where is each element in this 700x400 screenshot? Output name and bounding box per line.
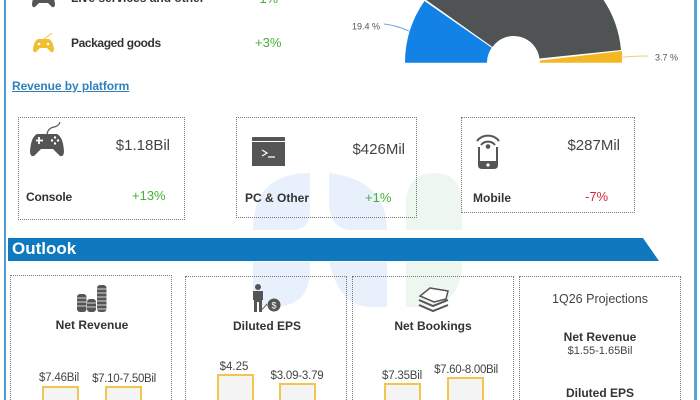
value: guidance: $7.10-7.50Bil	[92, 373, 156, 385]
label: 3.7 %: 3.7 %	[655, 52, 678, 62]
value: $426Mil	[352, 141, 405, 158]
label: 19.4 %: 19.4 %	[352, 22, 380, 32]
panel: pc and other	[236, 117, 417, 218]
label: net revenue: Net Revenue	[564, 330, 636, 344]
bar: guidance	[279, 383, 316, 400]
outer frame left edge	[4, 0, 6, 400]
value: net revenue: $1.55-1.65Bil	[568, 345, 632, 357]
change: +13%	[132, 188, 166, 203]
label: PC & Other	[245, 191, 309, 205]
value: guidance: $7.60-8.00Bil	[434, 364, 498, 376]
icon: mobile signal	[476, 134, 500, 169]
bar: prior	[384, 383, 421, 400]
heading: outlook: Outlook	[12, 239, 76, 258]
heading: revenue by platform: Revenue by platform	[12, 79, 129, 93]
half donut chart	[352, 0, 678, 63]
value: prior: $4.25	[220, 361, 248, 373]
icon: stacked papers	[418, 287, 449, 312]
leader: blue	[384, 24, 409, 31]
outer frame right edge	[694, 0, 697, 400]
value: prior: $7.35Bil	[382, 370, 422, 382]
value: prior: $7.46Bil	[39, 372, 79, 384]
panel: net bookings	[352, 276, 514, 400]
bar: guidance	[447, 377, 484, 400]
row label: packaged goods: Packaged goods	[71, 36, 161, 50]
panel: net revenue	[10, 275, 172, 400]
segment: blue	[405, 1, 492, 63]
icon: coin stacks	[77, 285, 106, 312]
panel: console	[18, 117, 185, 220]
icon: gamepad	[30, 122, 64, 156]
segment: grey	[426, 0, 621, 58]
icon: terminal	[252, 137, 285, 166]
section banner: outlook	[8, 238, 659, 261]
icon: packaged goods controller	[33, 32, 54, 52]
heading: Net Revenue	[56, 318, 128, 332]
bar: guidance	[105, 386, 142, 400]
value: $1.18Bil	[116, 137, 170, 154]
panel: mobile	[461, 117, 635, 213]
leader: yellow	[623, 56, 648, 57]
segment: yellow	[540, 51, 622, 63]
row value: packaged goods: +3%	[255, 35, 281, 50]
value: guidance: $3.09-3.79	[270, 370, 324, 382]
heading: 1Q26 Projections	[552, 292, 648, 306]
bar: prior	[42, 386, 79, 400]
panel: 1q26 projections	[519, 276, 681, 400]
label: Console	[26, 190, 72, 204]
label: diluted eps: Diluted EPS	[566, 386, 634, 400]
icon: live services controller	[32, 0, 55, 8]
value: $287Mil	[567, 137, 620, 154]
heading: Diluted EPS	[233, 319, 301, 333]
icon: person with coin: $	[271, 300, 277, 310]
icon: person with coin	[253, 284, 280, 312]
label: Mobile	[473, 191, 511, 205]
heading: Net Bookings	[394, 319, 472, 333]
panel: diluted eps	[185, 276, 347, 400]
bar: prior	[217, 374, 254, 400]
change: -7%	[585, 189, 608, 204]
change: +1%	[365, 190, 391, 205]
